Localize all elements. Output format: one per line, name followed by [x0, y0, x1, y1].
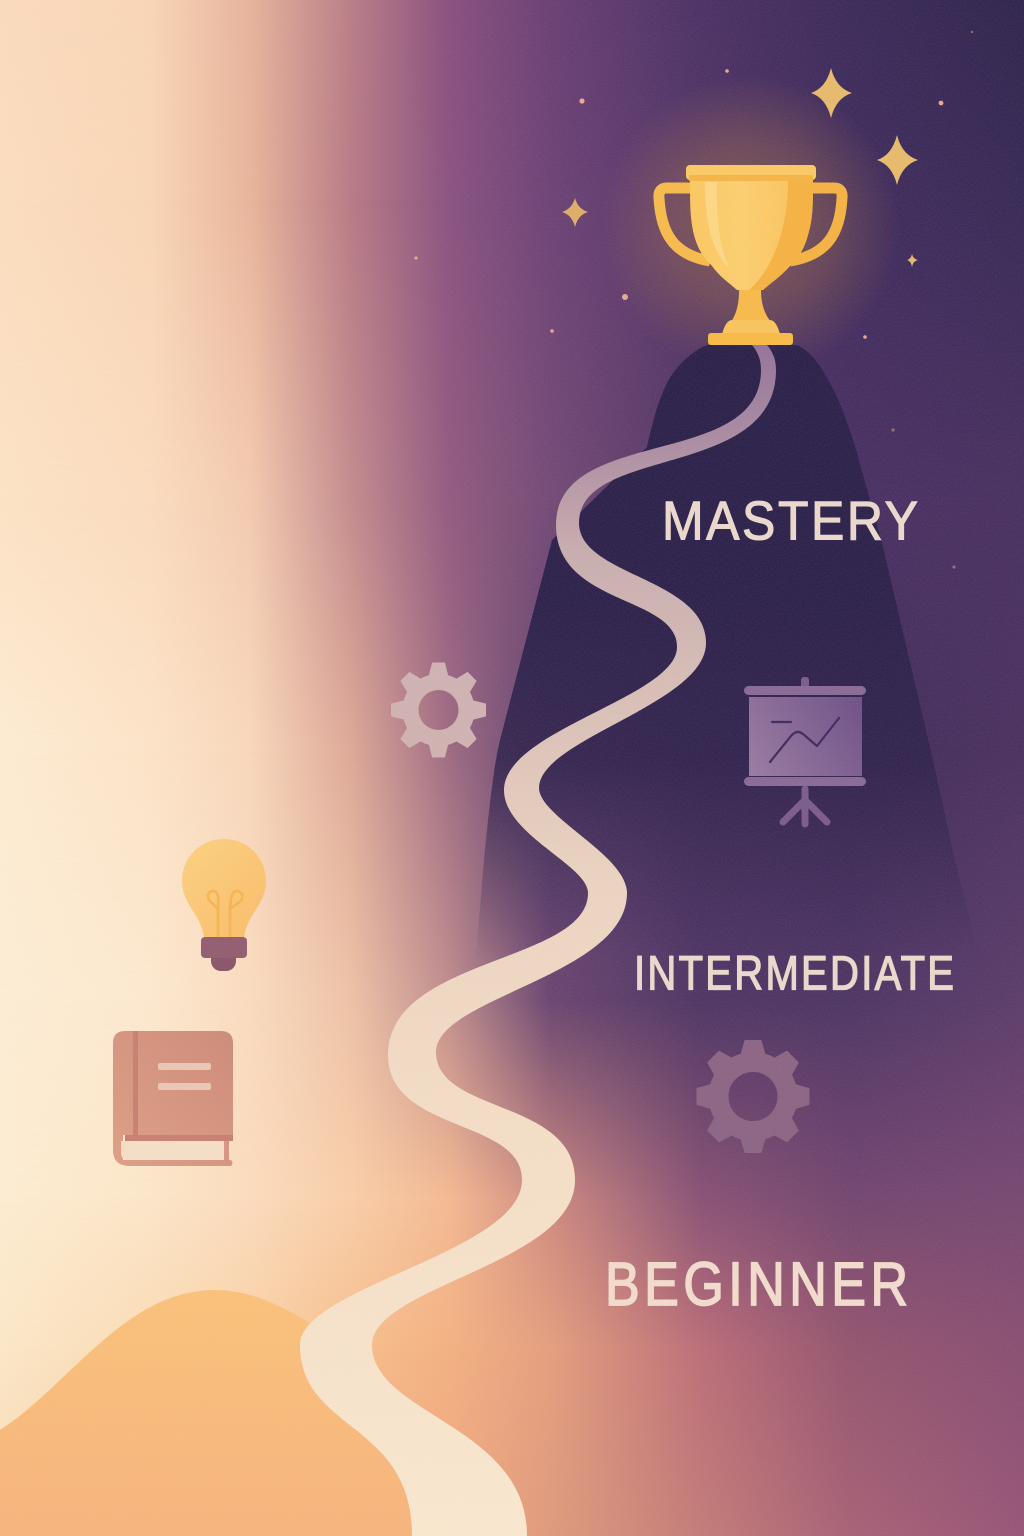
foothill [0, 1290, 520, 1536]
handle right [790, 188, 842, 261]
cup highlight [705, 182, 729, 268]
icon: light bulb [182, 839, 266, 971]
cup [690, 178, 813, 290]
icon: sparkle top [811, 68, 852, 118]
icon: presentation board [744, 677, 866, 824]
foot [708, 333, 793, 345]
winding path [300, 345, 776, 1536]
rim [686, 165, 816, 180]
icon: sparkle small [907, 254, 918, 267]
icon: book [113, 1031, 233, 1166]
trophy [659, 165, 842, 345]
icon: faded gear [392, 663, 486, 757]
handle left [659, 188, 710, 261]
label: beginner: BEGINNER [605, 1250, 908, 1318]
trophy glow [600, 75, 900, 375]
icon: gear [697, 1040, 809, 1152]
base tier [722, 320, 780, 334]
rim shadow [689, 175, 813, 181]
stem [731, 290, 771, 322]
label: mastery: MASTERY [662, 490, 918, 552]
stars and dots [414, 31, 973, 569]
icon: sparkle right [877, 135, 918, 185]
icon: sparkle left [562, 198, 588, 227]
label: intermediate: INTERMEDIATE [634, 947, 954, 1000]
mountain [476, 345, 980, 960]
cup right shade [747, 181, 813, 292]
